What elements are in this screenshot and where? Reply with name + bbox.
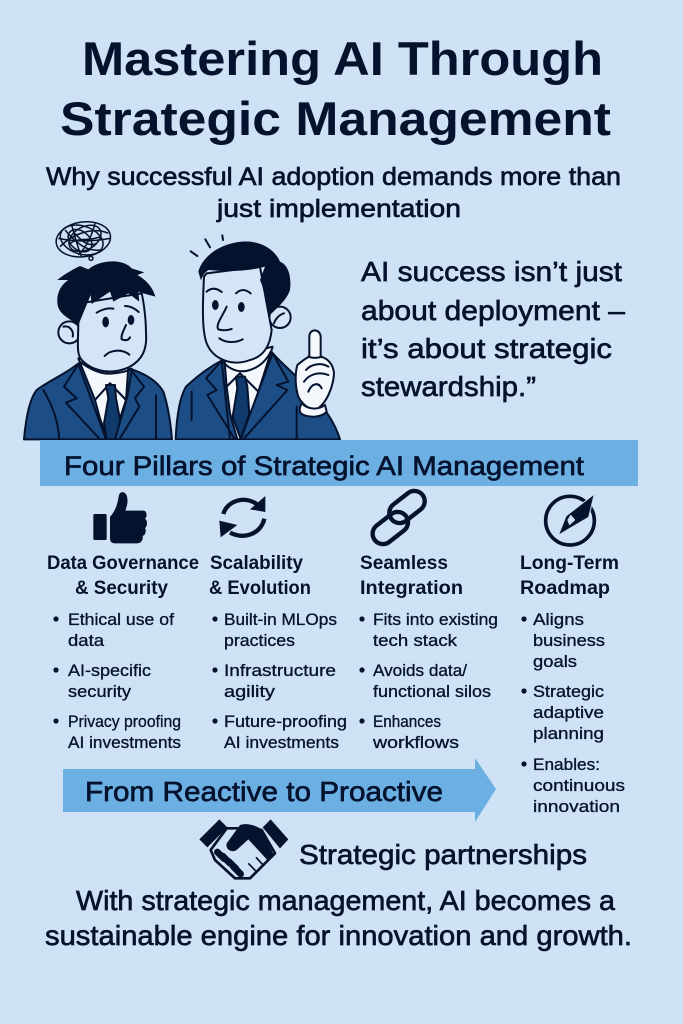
label: strategic partnerships: Strategic partnerships	[299, 839, 587, 870]
column: data governance	[47, 553, 199, 752]
quote	[361, 256, 625, 402]
column: roadmap	[520, 553, 625, 816]
quote: it’s about strategic	[361, 333, 612, 364]
icon: thumbs up	[93, 492, 147, 543]
icon: chain link	[368, 487, 429, 548]
heading: roadmap: Roadmap	[520, 578, 610, 599]
column: integration	[359, 553, 498, 752]
title	[60, 32, 611, 145]
illustration: two businessmen	[24, 218, 340, 439]
heading: scalability	[209, 553, 311, 599]
bullets: integration: workflows	[372, 733, 459, 752]
bullets: scalability: Future-proofing	[224, 712, 347, 731]
heading: integration: Integration	[360, 578, 463, 599]
bullets: data governance: AI investments	[68, 733, 181, 752]
bullets: integration	[359, 610, 498, 752]
bullets: scalability: Built-in MLOps	[224, 610, 337, 629]
subtitle: just implementation	[216, 195, 461, 223]
bullets: integration: Avoids data/	[373, 661, 467, 680]
bullets: scalability: Infrastructure	[224, 661, 336, 680]
column: scalability	[209, 553, 347, 752]
bullets: roadmap: business	[533, 631, 605, 650]
icon: tangled thought scribble	[54, 218, 113, 260]
icon: handshake	[199, 819, 288, 878]
heading: data governance	[47, 553, 199, 599]
bullets: scalability	[212, 610, 347, 752]
heading: scalability: & Evolution	[209, 578, 311, 599]
bullets: scalability: agility	[224, 682, 276, 701]
heading: data governance: & Security	[75, 578, 168, 599]
heading: data governance: Data Governance	[47, 553, 199, 574]
bullets: roadmap: planning	[533, 724, 604, 743]
bullets: data governance: Ethical use of	[68, 610, 174, 629]
quote: about deployment –	[361, 295, 625, 326]
worried man	[24, 261, 172, 439]
bullets: data governance: data	[68, 631, 105, 650]
bullets: integration: Enhances	[373, 712, 441, 731]
title: Strategic Management	[60, 92, 611, 145]
bullets: scalability: AI investments	[224, 733, 339, 752]
bullets: data governance: Privacy proofing	[68, 712, 181, 731]
bullets: roadmap: Enables:	[533, 755, 600, 774]
closing statement: With strategic management, AI becomes a	[76, 885, 615, 916]
heading: roadmap	[520, 553, 619, 599]
heading: roadmap: Long-Term	[520, 553, 619, 574]
banner: four pillars	[40, 440, 638, 486]
banner: four pillars: Four Pillars of Strategic AI Management	[64, 451, 585, 481]
bullets: integration: Fits into existing	[373, 610, 498, 629]
bullets: roadmap: Strategic	[533, 682, 605, 701]
confident man pointing up	[176, 235, 340, 439]
icon: refresh arrows	[219, 496, 265, 537]
bullets: roadmap: continuous	[533, 776, 625, 795]
bullets: roadmap: innovation	[533, 797, 620, 816]
bullets: roadmap: Aligns	[533, 610, 584, 629]
arrow: from reactive to proactive: From Reactive to Proactive	[85, 776, 443, 807]
bullets: scalability: practices	[224, 631, 295, 650]
closing statement: sustainable engine for innovation and growth.	[45, 920, 632, 951]
heading: integration	[360, 553, 463, 599]
quote: AI success isn’t just	[361, 256, 622, 287]
bullets: roadmap: goals	[533, 652, 577, 671]
subtitle	[46, 163, 621, 223]
closing statement	[45, 885, 632, 951]
bullets: integration: tech stack	[373, 631, 458, 650]
arrow: from reactive to proactive	[63, 758, 496, 822]
bullets: roadmap: adaptive	[533, 703, 604, 722]
bullets: data governance: AI-specific	[68, 661, 152, 680]
subtitle: Why successful AI adoption demands more than	[46, 163, 621, 191]
heading: integration: Seamless	[360, 553, 448, 574]
bullets: integration: functional silos	[373, 682, 491, 701]
title: Mastering AI Through	[82, 32, 603, 85]
quote: stewardship.”	[361, 371, 536, 402]
icon: raised hand	[296, 330, 334, 417]
bullets: data governance: security	[68, 682, 132, 701]
bullets: roadmap	[521, 610, 625, 816]
bullets: data governance	[53, 610, 181, 752]
heading: scalability: Scalability	[210, 553, 303, 574]
icon: compass	[546, 494, 594, 545]
